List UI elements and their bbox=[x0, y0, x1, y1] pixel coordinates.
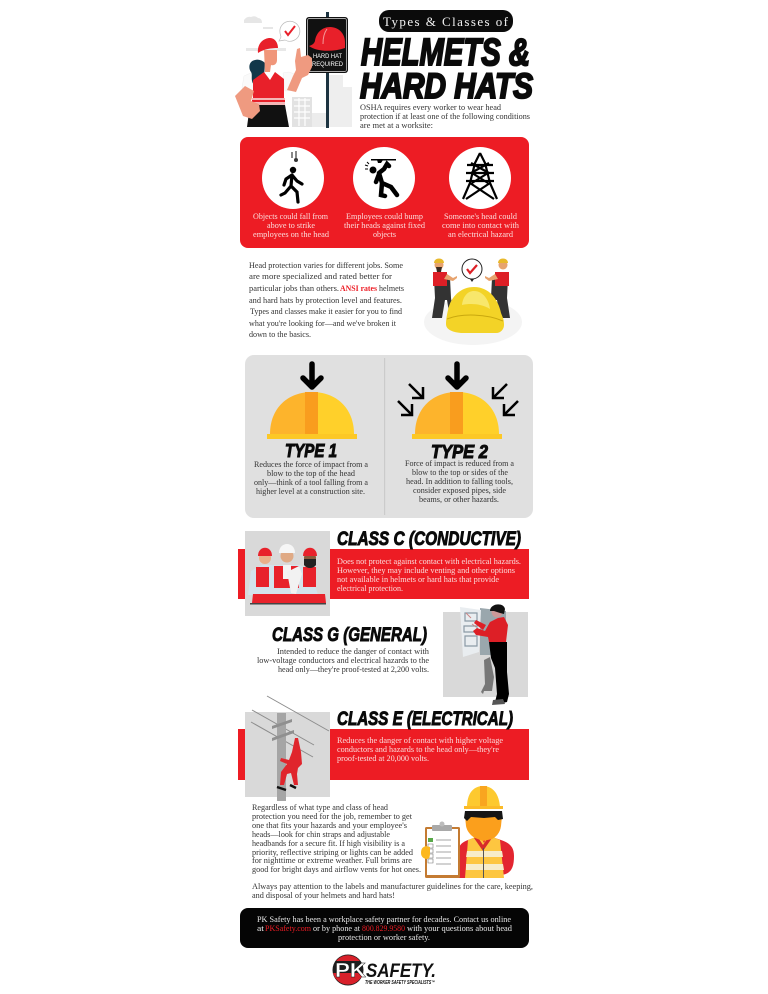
yellow hard hat bbox=[446, 287, 504, 333]
text: head protection varies: are more specialized and rated better for bbox=[249, 271, 392, 281]
text: always pay attention bbox=[252, 881, 533, 900]
icon: hard hat required sign bbox=[306, 17, 348, 73]
text: class C bbox=[337, 556, 521, 593]
text: type 1: higher level at a construction site. bbox=[256, 486, 365, 496]
text: type 2: consider exposed pipes, side bbox=[413, 485, 506, 495]
text: head protection varies: particular jobs than others. bbox=[249, 283, 339, 293]
text: regardless paragraph: headbands for a secure fit. If high visibility is a bbox=[252, 838, 405, 848]
title pill: Types & Classes of bbox=[383, 14, 509, 29]
text: bumping heads: objects bbox=[373, 229, 397, 239]
right worker bbox=[485, 258, 510, 318]
text: always pay attention: Always pay attention to the labels and manufacturer guidelines for the care, keeping, bbox=[252, 881, 533, 891]
icon: type 2 hard hat bbox=[412, 392, 502, 439]
text: class C: electrical protection. bbox=[337, 583, 403, 593]
icon: type 1 hard hat bbox=[267, 392, 357, 439]
text: head protection varies: Types and classes make it easier for you to find bbox=[250, 306, 403, 316]
text: class C: However, they may include venting and other options bbox=[337, 565, 516, 575]
text: head protection varies: ANSI rates bbox=[340, 283, 378, 293]
illustration: lineman on pole bbox=[245, 696, 330, 801]
intro text bbox=[360, 102, 531, 130]
text: bumping heads bbox=[344, 211, 426, 239]
icon: falling object and walking person bbox=[262, 147, 324, 209]
illustration: electrician at panel bbox=[443, 604, 528, 705]
text: regardless paragraph: good for bright days and airflow vents for hot ones. bbox=[252, 864, 421, 874]
callout: contact box: at bbox=[257, 923, 265, 933]
logo: PK Safety: SAFETY. bbox=[366, 961, 436, 982]
illustration: worker with clipboard bbox=[421, 786, 514, 878]
illustration: three workers bbox=[245, 531, 330, 616]
text: head protection varies bbox=[249, 260, 405, 339]
intro text: protection if at least one of the following conditions bbox=[360, 111, 531, 121]
callout: contact box: or by phone at bbox=[313, 923, 361, 933]
logo: PK Safety bbox=[332, 954, 436, 986]
text: electrical hazard: an electrical hazard bbox=[448, 229, 514, 239]
callout: contact box: with your questions about head bbox=[407, 923, 513, 933]
text: regardless paragraph: for nighttime or extreme weather. Full brims are bbox=[252, 855, 412, 865]
icon: electrical pylon bbox=[449, 147, 511, 209]
callout: contact box: PK Safety has been a workplace safety partner for decades. Contact us online bbox=[257, 914, 511, 924]
text: head protection varies: helmets bbox=[379, 283, 405, 293]
text: type 2 bbox=[405, 458, 514, 504]
text: regardless paragraph: heads—look for chin straps and adjustable bbox=[252, 829, 390, 839]
text: type 2: beams, or other hazards. bbox=[419, 494, 499, 504]
text: falling objects: employees on the head bbox=[253, 229, 330, 239]
text: electrical hazard: Someone's head could bbox=[444, 211, 518, 221]
icon: check speech bubble bbox=[279, 21, 300, 41]
intro text: OSHA requires every worker to wear head bbox=[360, 102, 502, 112]
text: type 2: head. In addition to falling tools, bbox=[406, 476, 513, 486]
text: type 1: Reduces the force of impact from a bbox=[254, 459, 368, 469]
clipboard bbox=[421, 822, 460, 878]
text: regardless paragraph: one that fits your hazards and your employee's bbox=[252, 820, 408, 830]
main heading: HARD HATS bbox=[360, 67, 533, 106]
text: class G: Intended to reduce the danger of contact with bbox=[277, 646, 430, 656]
text: falling objects: Objects could fall from bbox=[253, 211, 328, 221]
icon: hard hat required sign: REQUIRED bbox=[312, 61, 343, 68]
text: head protection varies: down to the basics. bbox=[249, 329, 311, 339]
text: head protection varies: what you're looking for—and we've broken it bbox=[249, 318, 397, 328]
text: head protection varies: Head protection varies for different jobs. Some bbox=[249, 260, 403, 270]
text: type 1 bbox=[254, 459, 368, 496]
panel: types bbox=[245, 355, 533, 518]
heading: class E: CLASS E (ELECTRICAL) bbox=[337, 709, 513, 730]
text: regardless paragraph: priority, reflective striping or lights can be added bbox=[252, 847, 414, 857]
title pill bbox=[379, 10, 513, 32]
icon: person bumping head bbox=[353, 147, 415, 209]
text: type 2: Force of impact is reduced from a bbox=[405, 458, 514, 468]
text: electrical hazard: come into contact with bbox=[442, 220, 520, 230]
text: class G: head only—they're proof-tested at 2,200 volts. bbox=[278, 664, 429, 674]
text: class G bbox=[257, 646, 430, 674]
text: class C: Does not protect against contact with electrical hazards. bbox=[337, 556, 521, 566]
text: falling objects bbox=[253, 211, 330, 239]
text: class E: Reduces the danger of contact with higher voltage bbox=[337, 735, 503, 745]
arrows: type 2 impacts bbox=[398, 364, 518, 415]
main heading bbox=[360, 32, 533, 106]
text: type 1: blow to the top of the head bbox=[267, 468, 356, 478]
heading: class G: CLASS G (GENERAL) bbox=[272, 625, 427, 646]
heading: type 1: TYPE 1 bbox=[285, 441, 337, 461]
text: type 1: only—think of a tool falling from a bbox=[254, 477, 368, 487]
text: class G: low-voltage conductors and electrical hazards to the bbox=[257, 655, 429, 665]
callout: contact box: protection or worker safety. bbox=[338, 932, 430, 942]
heading: class C: CLASS C (CONDUCTIVE) bbox=[337, 529, 521, 550]
text: class E bbox=[337, 735, 503, 763]
callout: contact box: PKSafety.com bbox=[265, 923, 311, 933]
text: bumping heads: their heads against fixed bbox=[344, 220, 426, 230]
icon: hard hat required sign: HARD HAT bbox=[313, 53, 342, 60]
text: class C: not available in helmets or hard hats that provide bbox=[337, 574, 499, 584]
icon: check bubble bbox=[462, 259, 482, 282]
arrow: type 1 impact bbox=[303, 364, 321, 387]
text: regardless paragraph: Regardless of what type and class of head bbox=[252, 802, 389, 812]
text: class E: proof-tested at 20,000 volts. bbox=[337, 753, 429, 763]
text: regardless paragraph bbox=[252, 802, 421, 874]
text: regardless paragraph: protection you need for the job, remember to get bbox=[252, 811, 413, 821]
text: type 2: blow to the top or sides of the bbox=[412, 467, 508, 477]
text: electrical hazard bbox=[442, 211, 520, 239]
illustration: inspectors and yellow hard hat bbox=[424, 258, 522, 345]
text: bumping heads: Employees could bump bbox=[346, 211, 424, 221]
intro text: are met at a worksite: bbox=[360, 120, 433, 130]
panel: class G bbox=[257, 604, 528, 705]
text: always pay attention: and disposal of your helmets and hard hats! bbox=[252, 890, 395, 900]
panel: class C bbox=[238, 529, 529, 616]
hero illustration: worker and hard hat sign bbox=[235, 12, 352, 128]
panel: conditions bbox=[240, 137, 529, 248]
panel: class E bbox=[238, 696, 529, 801]
woman worker bbox=[235, 38, 312, 127]
text: head protection varies: and hard hats by protection level and features. bbox=[249, 295, 402, 305]
heading: type 2: TYPE 2 bbox=[431, 441, 489, 462]
left worker bbox=[432, 258, 457, 318]
text: falling objects: above to strike bbox=[267, 220, 315, 230]
text: class E: conductors and hazards to the head only—they're bbox=[337, 744, 499, 754]
logo: PK Safety: THE WORKER SAFETY SPECIALISTS™ bbox=[365, 980, 435, 986]
logo: PK Safety: PK bbox=[335, 960, 367, 982]
callout: contact box: 800.829.9580 bbox=[362, 923, 406, 933]
callout: contact box bbox=[240, 908, 529, 948]
main heading: HELMETS & bbox=[361, 32, 530, 74]
